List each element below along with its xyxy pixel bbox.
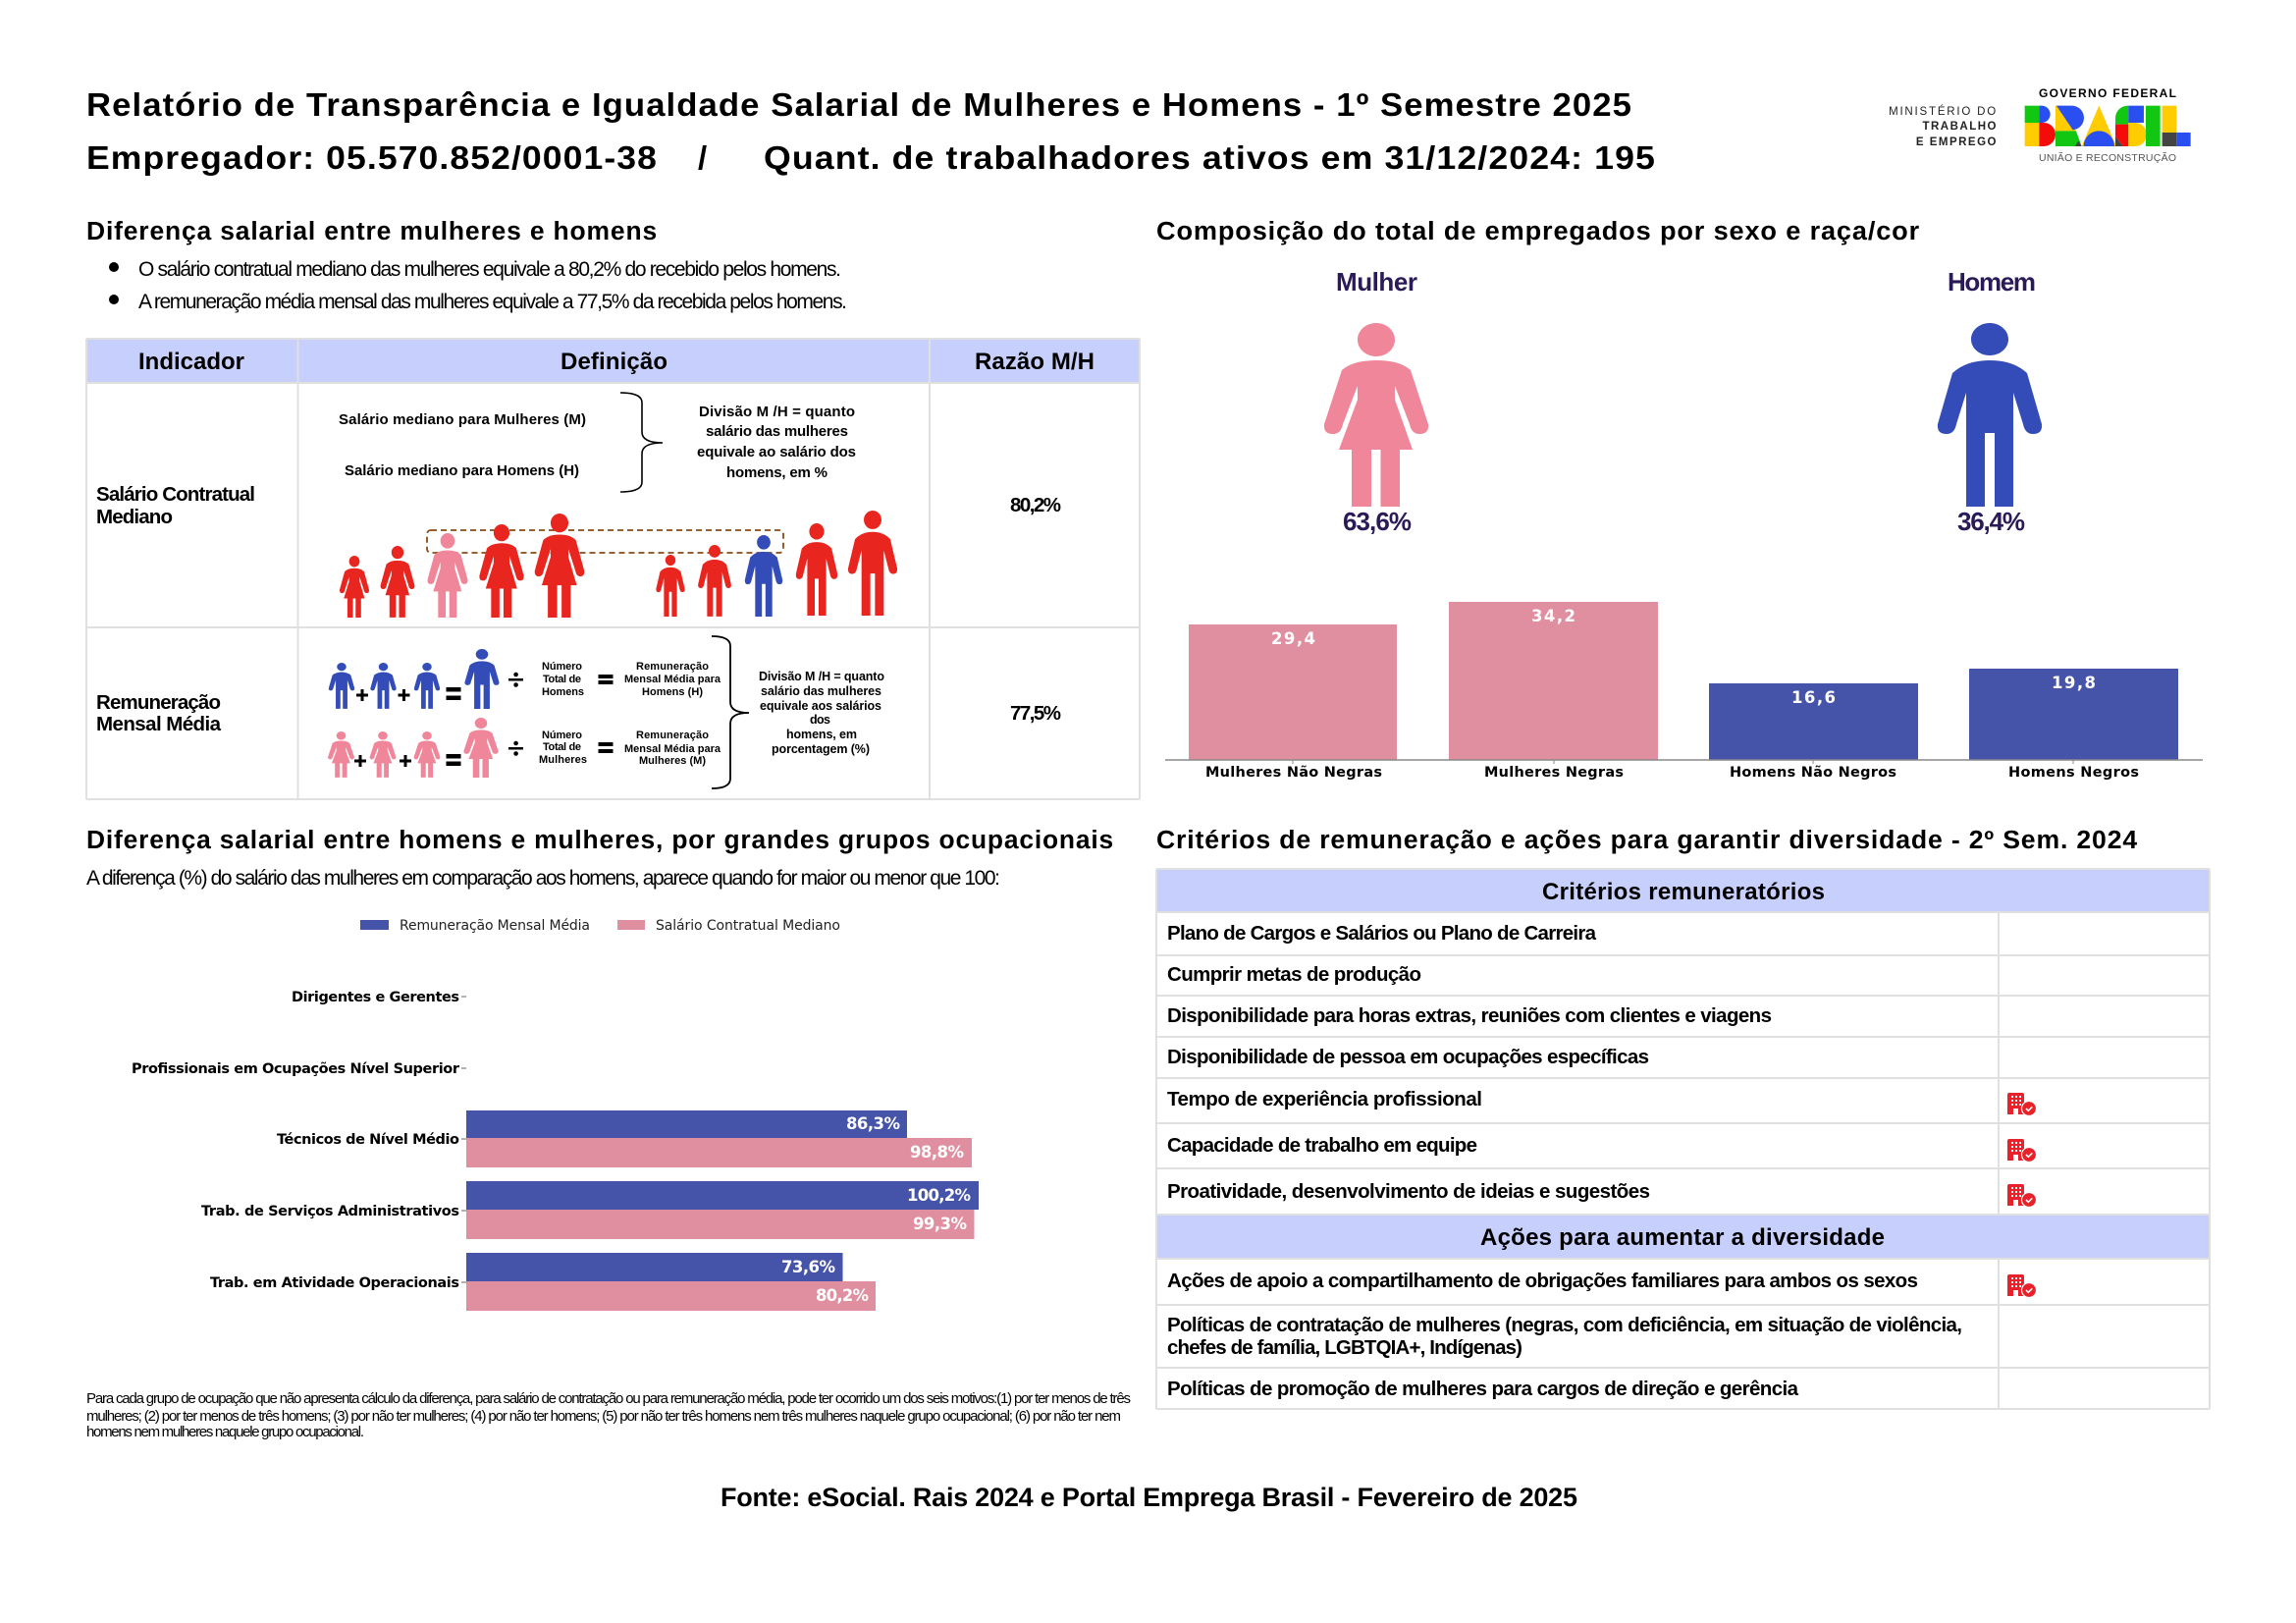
bar chart: sexo e raça/cor: 19,8 [2052,674,2096,692]
row label: Remuneração Mensal Média: Mensal Média [96,713,222,735]
criteria list: Disponibilidade de pessoa em ocupações específicas [1167,1046,1649,1068]
value: 80,2%: 80,2% [1010,494,1061,516]
definition: remuneração média: Número [542,730,582,741]
definition: mediano: salário das mulheres [706,423,848,440]
icon: company check, equipe [2007,1139,2036,1163]
table header: Indicador [138,349,244,375]
bar chart: sexo e raça/cor: 29,4 [1271,629,1315,648]
row label: Salário Contratual Mediano: Mediano [96,506,173,528]
bar chart: grupos ocupacionais: 80,2% [816,1286,869,1305]
panel: Mulher share: Mulher [1336,267,1417,297]
definition: remuneração média: dos [810,713,830,727]
bar chart: grupos ocupacionais: Técnicos de Nível Médio [277,1132,459,1148]
panel: indicator table [86,339,1140,799]
definition: mediano: Salário mediano para Mulheres (M) [339,411,586,428]
panel: Homem share: 36,4% [1957,507,2025,536]
bar chart: sexo e raça/cor: Homens Não Negros [1730,765,1896,781]
panel: criteria table [1156,869,2210,1409]
definition: remuneração média: Número [542,661,582,673]
title: Quant. de trabalhadores ativos em 31/12/2024: 195 [764,139,1656,176]
table header: Razão M/H [975,349,1095,375]
definition: remuneração média: Total de [543,741,581,753]
bar chart: sexo e raça/cor: Homens Negros [2008,765,2139,781]
row label: Salário Contratual Mediano [96,483,255,528]
heading: Critérios: Critérios de remuneração e ações para garantir diversidade - 2º Sem. 2024 [1156,827,2138,854]
text block: explanation: A diferença (%) do salário das mulheres em comparação aos homens, aparece quando for maior ou menor que 100: [86,867,1000,890]
definition: remuneração média: Mensal Média para [624,674,721,685]
criteria list: Proatividade, desenvolvimento de ideias e sugestões [1167,1180,1650,1203]
definition: remuneração média [328,636,884,788]
footnote: mulheres; (2) por ter menos de três homens; (3) por não ter mulheres; (4) por não ter homens; (5) por não ter três homens nem três mulheres naquele grupo ocupacional; (6) por não ter nem [86,1408,1121,1425]
chart legend: Remuneração Mensal Média [400,918,590,934]
icon: company check, obrigações familiares [2007,1274,2036,1298]
bar chart: grupos ocupacionais: Trab. em Atividade Operacionais [210,1275,459,1291]
icon: company check, proatividade [2007,1184,2036,1208]
panel: Homem share [1938,267,2042,536]
bar chart: grupos ocupacionais [132,990,979,1311]
logo: Governo Federal Brasil: UNIÃO E RECONSTRUÇÃO [2039,151,2176,164]
bar chart: grupos ocupacionais: 73,6% [781,1258,835,1276]
definition: remuneração média: Homens [542,686,584,698]
panel: Mulher share [1324,267,1428,536]
actions list: Políticas de promoção de mulheres para cargos de direção e gerência [1167,1378,1799,1400]
panel: Homem share: Homem [1948,267,2036,297]
title: / [698,139,708,176]
header: Ações para aumentar a diversidade: Ações para aumentar a diversidade [1480,1224,1885,1251]
actions list: Políticas de contratação de mulheres (negras, com deficiência, em situação de violência, [1167,1314,1962,1336]
bar chart: grupos ocupacionais: 100,2% [907,1186,971,1205]
bar chart: sexo e raça/cor [1165,602,2203,781]
criteria list: Cumprir metas de produção [1167,963,1421,986]
bar chart: sexo e raça/cor: 34,2 [1531,607,1575,625]
text block: key findings: A remuneração média mensal das mulheres equivale a 77,5% da recebida pelos homens. [138,291,847,313]
header: Critérios remuneratórios: Critérios remuneratórios [1542,879,1825,905]
heading: Composição: Composição do total de empregados por sexo e raça/cor [1156,218,1920,245]
actions list: chefes de família, LGBTQIA+, Indígenas) [1167,1336,1522,1359]
footnote [86,1390,1131,1440]
criteria list: Capacidade de trabalho em equipe [1167,1134,1477,1157]
row label: Remuneração Mensal Média [96,691,222,735]
definition: remuneração média: equivale aos salários [760,699,881,713]
row label: Remuneração Mensal Média: Remuneração [96,691,221,714]
bar chart: grupos ocupacionais: Trab. de Serviços Administrativos [201,1204,459,1219]
definition: mediano: Salário mediano para Homens (H) [345,462,579,479]
actions list: Ações de apoio a compartilhamento de obrigações familiares para ambos os sexos [1167,1270,1918,1292]
bar chart: sexo e raça/cor: Mulheres Negras [1484,765,1624,781]
logo: Governo Federal Brasil: GOVERNO FEDERAL [2039,86,2176,100]
pictogram: mediano figures [340,511,897,618]
definition: mediano [339,393,856,492]
definition: remuneração média: Divisão M /H = quanto [759,670,884,683]
definition: remuneração média: Mulheres [539,754,587,766]
criteria list: Tempo de experiência profissional [1167,1088,1482,1110]
text block: key findings [109,258,847,313]
definition: mediano: homens, em % [726,464,828,481]
definition: remuneração média: Mulheres (M) [639,755,706,767]
definition: mediano: equivale ao salário dos [697,444,856,460]
title: Empregador: 05.570.852/0001-38 [86,139,658,176]
title: Relatório de Transparência e Igualdade Salarial de Mulheres e Homens - 1º Semestre 2025 [86,86,1632,123]
footnote: homens nem mulheres naquele grupo ocupacional. [86,1424,364,1440]
bar chart: sexo e raça/cor: 16,6 [1791,688,1836,707]
definition: remuneração média: porcentagem (%) [772,742,870,756]
criteria list [1167,922,1772,1203]
logo: Governo Federal Brasil [2025,86,2191,164]
chart legend: Salário Contratual Mediano [656,918,840,934]
criteria list: Plano de Cargos e Salários ou Plano de Carreira [1167,922,1597,945]
definition: remuneração média: Total de [543,674,581,685]
bar chart: grupos ocupacionais: 98,8% [910,1143,964,1162]
value: 77,5%: 77,5% [1010,702,1061,725]
table header [138,349,1095,375]
logo: Ministério do Trabalho e Emprego [1889,105,1998,148]
bar chart: grupos ocupacionais: Profissionais em Ocupações Nível Superior [132,1061,460,1077]
definition: remuneração média: Remuneração [636,730,709,741]
footnote: Para cada grupo de ocupação que não apresenta cálculo da diferença, para salário de contratação ou para remuneração média, pode ter ocorrido um dos seis motivos:(1) por ter menos de três [86,1390,1131,1407]
logo: Ministério do Trabalho e Emprego: TRABALHO [1922,121,1998,133]
definition: remuneração média: homens, em [786,728,857,741]
bar chart: grupos ocupacionais: 86,3% [846,1114,900,1133]
text block: key findings: O salário contratual mediano das mulheres equivale a 80,2% do recebido pelos homens. [138,258,841,281]
actions list [1167,1270,1962,1400]
icon: company check, experiência [2007,1093,2036,1115]
bar chart: sexo e raça/cor: Mulheres Não Negras [1205,765,1382,781]
panel: Mulher share: 63,6% [1343,507,1412,536]
logo: Ministério do Trabalho e Emprego: E EMPREGO [1916,136,1998,148]
heading: Diferença salarial: Diferença salarial entre mulheres e homens [86,218,658,245]
definition: mediano: Divisão M /H = quanto [699,404,855,420]
title [86,86,1656,176]
bar chart: grupos ocupacionais: Dirigentes e Gerentes [292,990,459,1005]
source line: Fonte: eSocial. Rais 2024 e Portal Emprega Brasil - Fevereiro de 2025 [721,1483,1577,1512]
table header: Definição [561,349,667,375]
row label: Salário Contratual Mediano: Salário Contratual [96,483,255,506]
heading: grandes grupos ocupacionais: Diferença salarial entre homens e mulheres, por grandes grupos ocupacionais [86,827,1114,854]
definition: remuneração média: salário das mulheres [761,684,881,698]
bar chart: grupos ocupacionais: 99,3% [913,1215,967,1233]
definition: remuneração média: Homens (H) [642,686,703,698]
definition: remuneração média: Mensal Média para [624,743,721,755]
chart legend [360,918,840,934]
definition: remuneração média: Remuneração [636,661,709,673]
criteria list: Disponibilidade para horas extras, reuniões com clientes e viagens [1167,1004,1772,1027]
logo: Ministério do Trabalho e Emprego: MINISTÉRIO DO [1889,105,1998,118]
